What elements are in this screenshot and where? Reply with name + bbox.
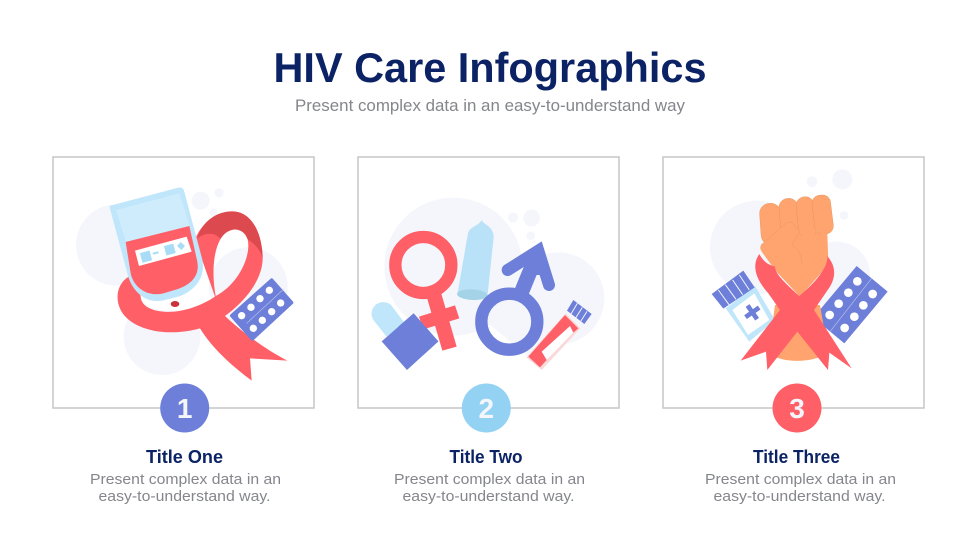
illustration: blood bag and ribbon [76, 187, 292, 381]
female symbol [395, 237, 459, 355]
raised fist [759, 194, 834, 361]
text block: title three: Title Three [753, 447, 840, 467]
text block: title one: Present complex data in an [90, 472, 281, 488]
number badge 2: 2 [479, 393, 494, 424]
text block: title two: easy-to-understand way. [402, 489, 574, 505]
ribbon [118, 211, 287, 381]
panel: two [358, 157, 619, 432]
test tube [526, 300, 592, 370]
text block: title one [90, 447, 281, 505]
illustration: fist, ribbon and medicine [710, 169, 888, 370]
pill blister [813, 266, 888, 343]
title: HIV Care Infographics [274, 44, 706, 91]
condom [457, 220, 494, 301]
ribbon [741, 254, 852, 370]
text block: title three: easy-to-understand way. [714, 489, 886, 505]
number badge 3 [772, 384, 822, 432]
lubricant tube [372, 302, 438, 370]
text block: title two [394, 447, 585, 505]
number badge 1: 1 [177, 393, 192, 424]
text block: title two: Present complex data in an [394, 472, 585, 488]
number badge 3: 3 [789, 393, 805, 424]
panel: one [53, 157, 314, 432]
text block: title two: Title Two [450, 447, 522, 467]
male symbol [481, 248, 549, 350]
number badge 2 [462, 384, 511, 432]
number badge 1 [160, 384, 209, 432]
text block: title three [705, 447, 896, 505]
panel: three [663, 157, 924, 432]
text block: title three: Present complex data in an [705, 472, 896, 488]
pill blister [232, 280, 292, 339]
text block: title one: easy-to-understand way. [98, 489, 270, 505]
text block: title one: Title One [146, 447, 223, 467]
blood bag [109, 187, 203, 311]
medicine bottle [712, 271, 775, 342]
illustration: gender symbols and condom [372, 198, 604, 370]
subtitle: Present complex data in an easy-to-understand way [295, 97, 686, 115]
